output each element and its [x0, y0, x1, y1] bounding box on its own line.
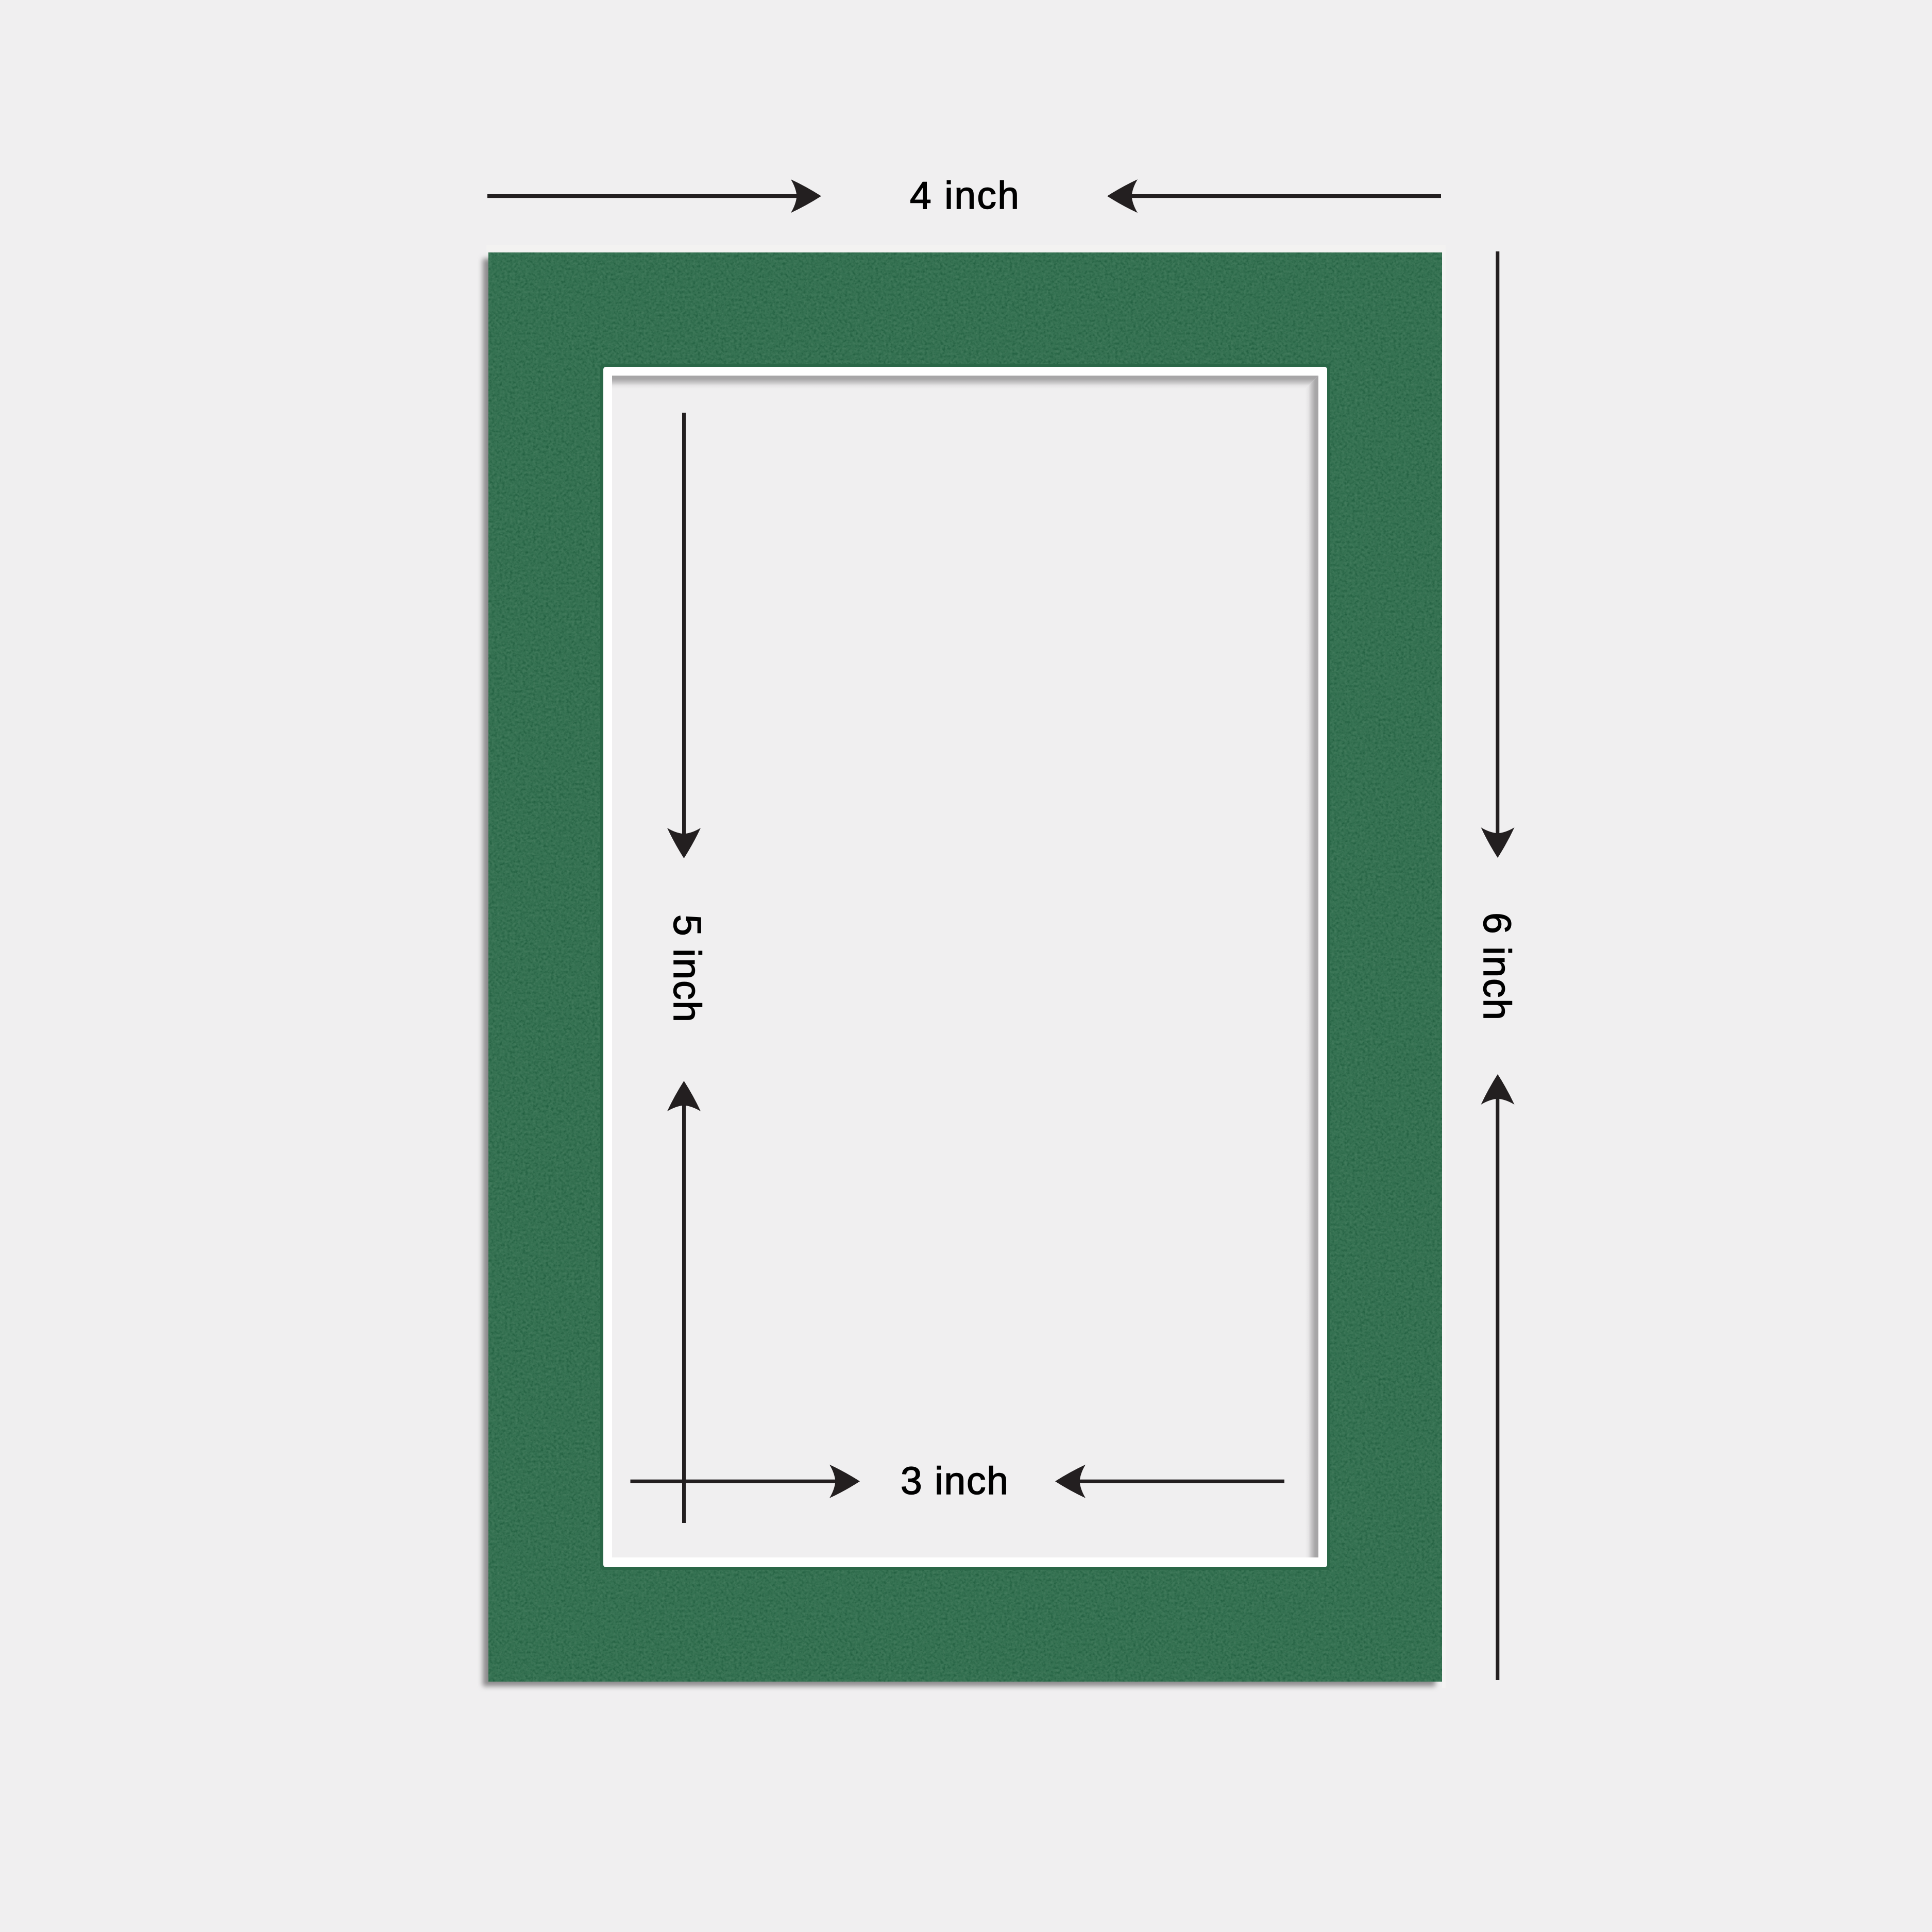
- white inner bevel: [603, 367, 1327, 1567]
- label: 4 inch: 4 inch: [910, 174, 1019, 217]
- bevel shadow right: [1305, 376, 1318, 1557]
- label: 6 inch: 6 inch: [1476, 912, 1519, 1020]
- photo mat board: [483, 245, 1446, 1688]
- green mat surface: [488, 252, 1442, 1682]
- dimension: outer height 6 inch: [1476, 251, 1519, 1680]
- arrow: left pointing right: [487, 179, 821, 213]
- arrow: bottom pointing up: [1481, 1074, 1515, 1680]
- dimension: window height 5 inch: [666, 413, 709, 1523]
- dimension: window width 3 inch: [631, 1459, 1284, 1502]
- arrow: left pointing right: [631, 1465, 860, 1498]
- arrow: right pointing left: [1107, 179, 1441, 213]
- dimension: outer width 4 inch: [487, 174, 1441, 217]
- arrow: right pointing left: [1055, 1465, 1284, 1498]
- label: 5 inch: 5 inch: [666, 914, 709, 1022]
- arrow: top pointing down: [667, 413, 701, 858]
- arrow: top pointing down: [1481, 251, 1515, 858]
- window opening: [612, 376, 1318, 1557]
- bevel shadow top: [612, 376, 1318, 389]
- label: 3 inch: 3 inch: [901, 1459, 1008, 1502]
- arrow: bottom pointing up: [667, 1081, 701, 1523]
